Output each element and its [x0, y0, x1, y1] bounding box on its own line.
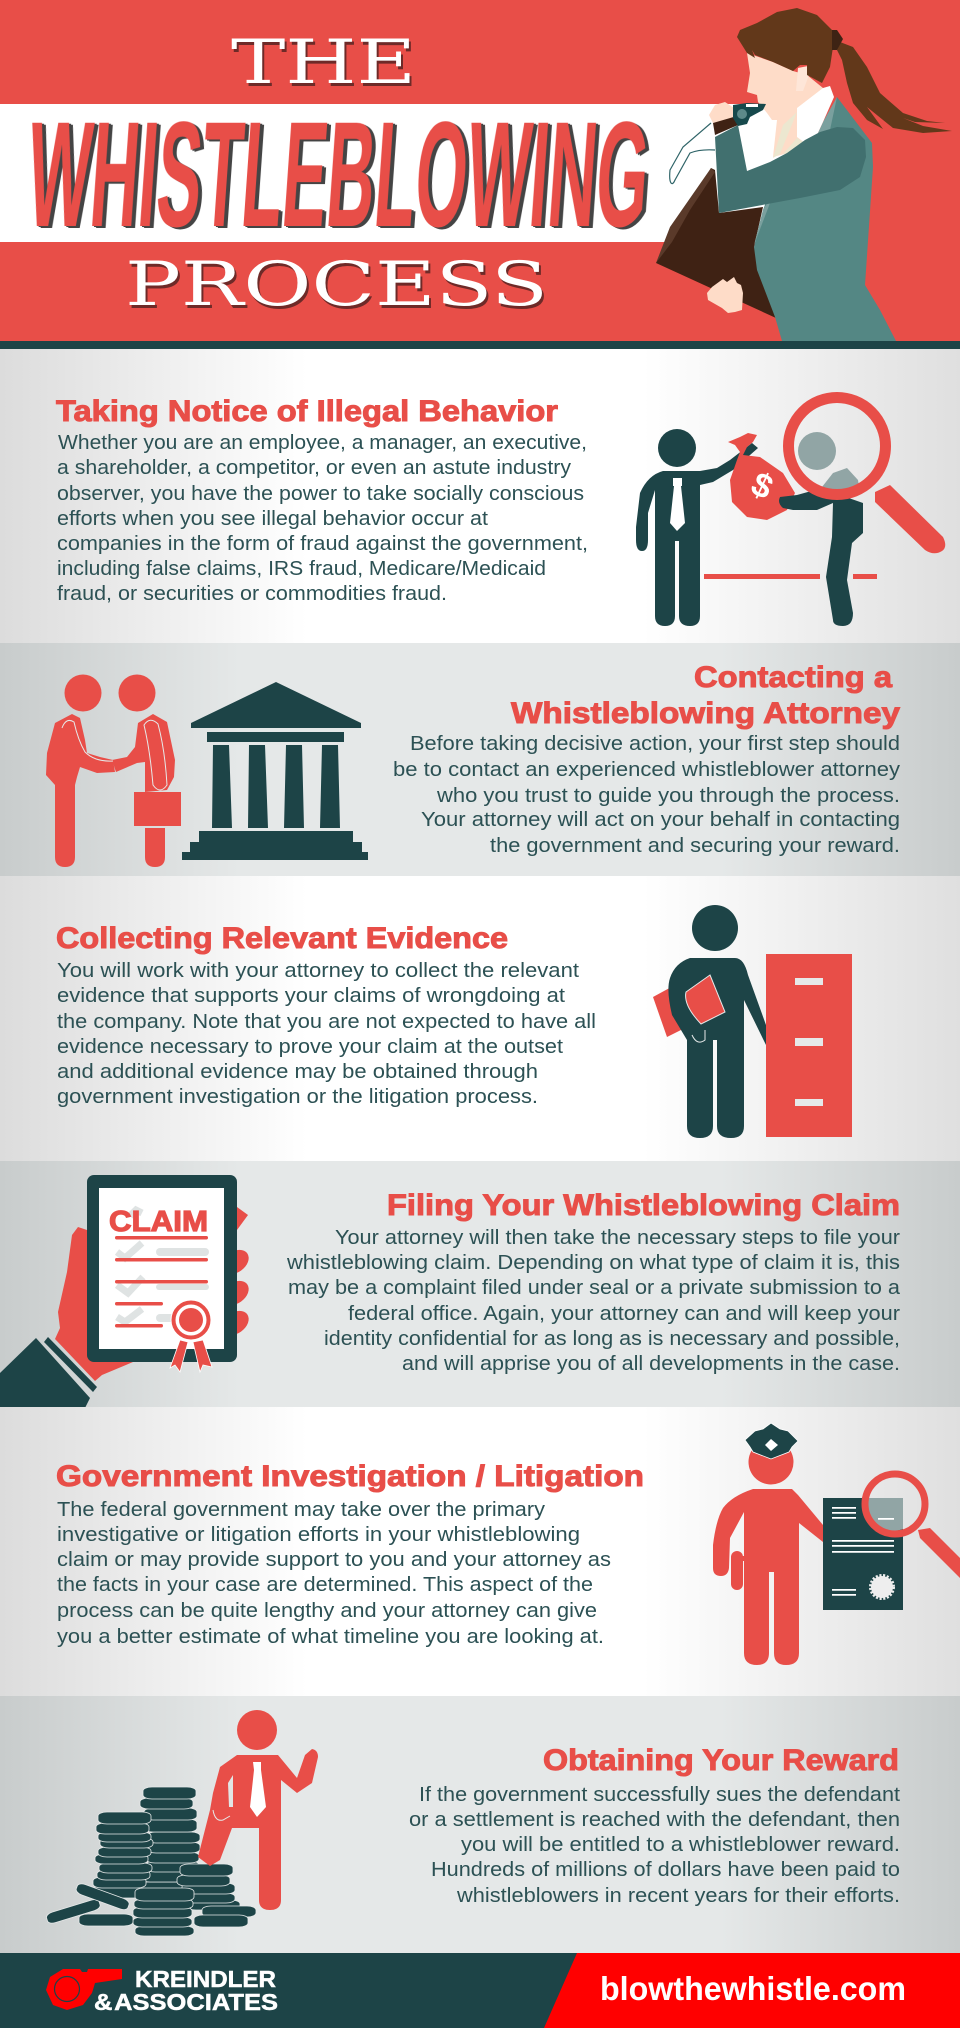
body text: be to contact an experienced whistleblower attorney	[393, 759, 900, 781]
body text: the government and securing your reward.	[490, 835, 900, 857]
body text	[393, 733, 900, 857]
body text: process can be quite lengthy and your attorney can give	[57, 1600, 597, 1622]
body text: evidence that supports your claims of wrongdoing at	[57, 985, 565, 1007]
body text: and additional evidence may be obtained through	[57, 1061, 538, 1083]
body text: The federal government may take over the primary	[57, 1499, 545, 1521]
body text: companies in the form of fraud against the government,	[57, 533, 588, 555]
body text: including false claims, IRS fraud, Medicare/Medicaid	[57, 558, 546, 580]
body text	[57, 960, 596, 1108]
body text: whistleblowing claim. Depending on what type of claim it is, this	[286, 1252, 900, 1274]
panel: filing your whistleblowing claim	[0, 1161, 960, 1408]
website url: blowthewhistle.com	[600, 1970, 906, 2007]
body text: the facts in your case are determined. This aspect of the	[57, 1574, 593, 1596]
title: PROCESS: PROCESS	[125, 249, 548, 320]
body text: investigative or litigation efforts in your whistleblowing	[57, 1524, 580, 1546]
body text: fraud, or securities or commodities fraud.	[57, 583, 447, 605]
body text: If the government successfully sues the defendant	[419, 1784, 900, 1806]
icon: person with folder and filing cabinet	[653, 905, 852, 1138]
icon: bribe exchange with magnifier: $	[745, 465, 779, 507]
company name	[94, 1966, 278, 2015]
panel: government investigation / litigation	[0, 1407, 960, 1696]
body text: Your attorney will act on your behalf in contacting	[421, 809, 900, 831]
body text: Whether you are an employee, a manager, an executive,	[58, 432, 587, 454]
icon: hand holding claim tablet	[0, 1175, 253, 1408]
body text	[286, 1227, 901, 1375]
body text: and will apprise you of all developments in the case.	[402, 1353, 900, 1375]
heading: Collecting Relevant Evidence	[56, 922, 508, 955]
icon: courthouse	[182, 682, 368, 860]
body text: the company. Note that you are not expected to have all	[57, 1011, 596, 1033]
body text	[57, 1499, 611, 1648]
icon: handshake with briefcase	[46, 674, 368, 867]
title: THE: THE	[231, 27, 416, 98]
body text: who you trust to guide you through the process.	[436, 785, 900, 807]
panel: contacting a whistleblowing attorney	[0, 643, 960, 876]
icon: hand holding claim tablet: CLAIM	[109, 1206, 208, 1238]
icon: officer with document and magnifier	[713, 1423, 960, 1665]
icon: man standing on coin stacks	[45, 1710, 318, 1936]
illustration: woman blowing whistle	[656, 8, 952, 341]
panel: obtaining your reward	[0, 1696, 960, 1953]
body text: you a better estimate of what timeline you are looking at.	[57, 1626, 604, 1648]
heading: Filing Your Whistleblowing Claim	[387, 1189, 900, 1222]
body text: Hundreds of millions of dollars have been paid to	[431, 1859, 900, 1881]
body text: whistleblowers in recent years for their efforts.	[456, 1885, 900, 1907]
body text: evidence necessary to prove your claim at the outset	[57, 1036, 563, 1058]
heading	[511, 661, 900, 730]
panel: collecting relevant evidence	[0, 876, 960, 1161]
body text	[57, 432, 588, 605]
body text: you will be entitled to a whistleblower reward.	[461, 1834, 900, 1856]
heading: Contacting a	[694, 661, 892, 694]
body text: Before taking decisive action, your first step should	[410, 733, 900, 755]
body text: claim or may provide support to you and your attorney as	[57, 1549, 611, 1571]
heading: Whistleblowing Attorney	[511, 697, 900, 730]
body text	[409, 1784, 900, 1907]
logo: whistle	[46, 1969, 122, 2010]
body text: efforts when you see illegal behavior occur at	[57, 508, 488, 530]
header banner	[0, 0, 960, 349]
company name: KREINDLER	[135, 1966, 276, 1992]
body text: a shareholder, a competitor, or even an astute industry	[57, 457, 571, 479]
red website block	[544, 1953, 960, 2028]
body text: identity confidential for as long as is necessary and possible,	[324, 1328, 900, 1350]
icon: bribe exchange with magnifier	[636, 398, 945, 626]
heading: Obtaining Your Reward	[543, 1744, 899, 1777]
body text: may be a complaint filed under seal or a private submission to a	[288, 1277, 901, 1299]
body text: You will work with your attorney to collect the relevant	[57, 960, 579, 982]
body text: or a settlement is reached with the defendant, then	[409, 1809, 900, 1831]
heading: Government Investigation / Litigation	[56, 1460, 644, 1493]
company name: & ASSOCIATES	[94, 1989, 278, 2015]
body text: Your attorney will then take the necessary steps to file your	[335, 1227, 900, 1249]
body text: observer, you have the power to take socially conscious	[57, 483, 584, 505]
body text: government investigation or the litigation process.	[57, 1086, 538, 1108]
footer bar	[0, 1953, 960, 2028]
body text: federal office. Again, your attorney can and will keep your	[348, 1303, 900, 1325]
panel: taking notice of illegal behavior	[0, 349, 960, 643]
heading: Taking Notice of Illegal Behavior	[56, 395, 558, 428]
